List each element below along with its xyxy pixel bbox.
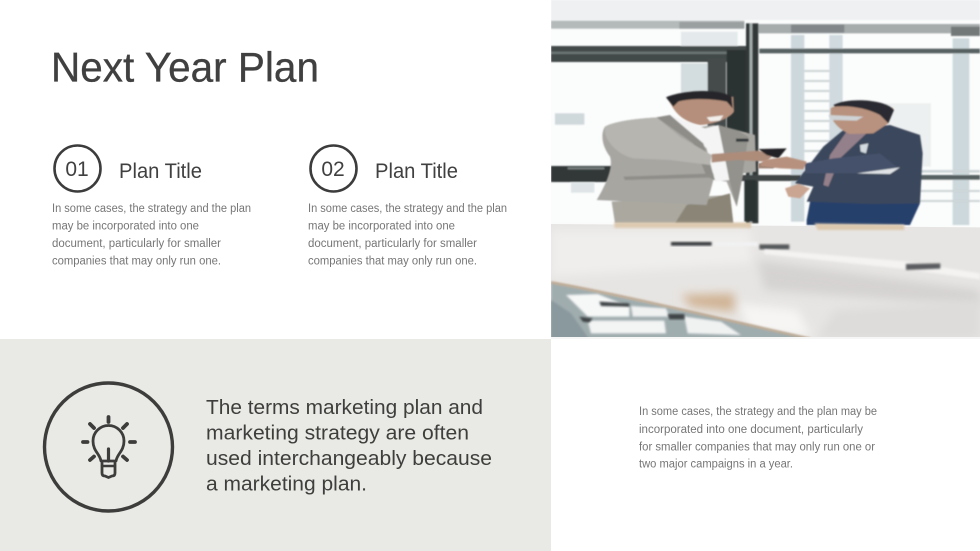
text block: quote: marketing strategy are often: [206, 422, 469, 444]
text block: plan 02 body: [308, 203, 507, 268]
badge: 02: [310, 146, 356, 192]
heading: plan title 01: Plan Title: [119, 159, 202, 183]
panel: plan 02: [308, 146, 507, 268]
man left: grey suit: [597, 91, 787, 223]
heading: plan title 02: Plan Title: [375, 159, 458, 183]
man right: navy suit: [760, 100, 923, 225]
text block: plan 01 body: may be incorporated into one: [52, 220, 199, 232]
icon: light bulb in circle: [44, 383, 172, 511]
badge: 01: 01: [65, 158, 89, 181]
text block: plan 01 body: document, particularly for smaller: [52, 238, 221, 250]
text block: plan 02 body: In some cases, the strategy and the plan: [308, 203, 507, 215]
panel: plan 01: [52, 146, 251, 268]
text block: side note: In some cases, the strategy and the plan may be: [639, 406, 877, 418]
text block: plan 02 body: may be incorporated into one: [308, 220, 455, 232]
panel: highlighted quote band: [0, 339, 551, 551]
text block: side note: for smaller companies that may only run one or: [639, 442, 875, 454]
text block: quote: [206, 397, 492, 496]
text block: quote: used interchangeably because: [206, 448, 492, 470]
text block: quote: a marketing plan.: [206, 474, 367, 496]
text block: plan 01 body: In some cases, the strategy and the plan: [52, 203, 251, 215]
text block: plan 02 body: document, particularly for smaller: [308, 238, 477, 250]
text block: quote: The terms marketing plan and: [206, 397, 483, 419]
text block: plan 01 body: [52, 203, 251, 268]
text block: side note: [639, 406, 877, 470]
text block: side note: two major campaigns in a year.: [639, 458, 793, 470]
badge: 02: 02: [321, 158, 345, 181]
badge: 01: [54, 146, 100, 192]
text block: side note: incorporated into one document, particularly: [639, 424, 863, 436]
photo: two businessmen at a meeting table: [551, 0, 980, 339]
title: Next Year Plan: [51, 44, 319, 90]
text block: plan 02 body: companies that may only run one.: [308, 256, 477, 268]
conference table: [551, 223, 980, 339]
text block: plan 01 body: companies that may only run one.: [52, 256, 221, 268]
